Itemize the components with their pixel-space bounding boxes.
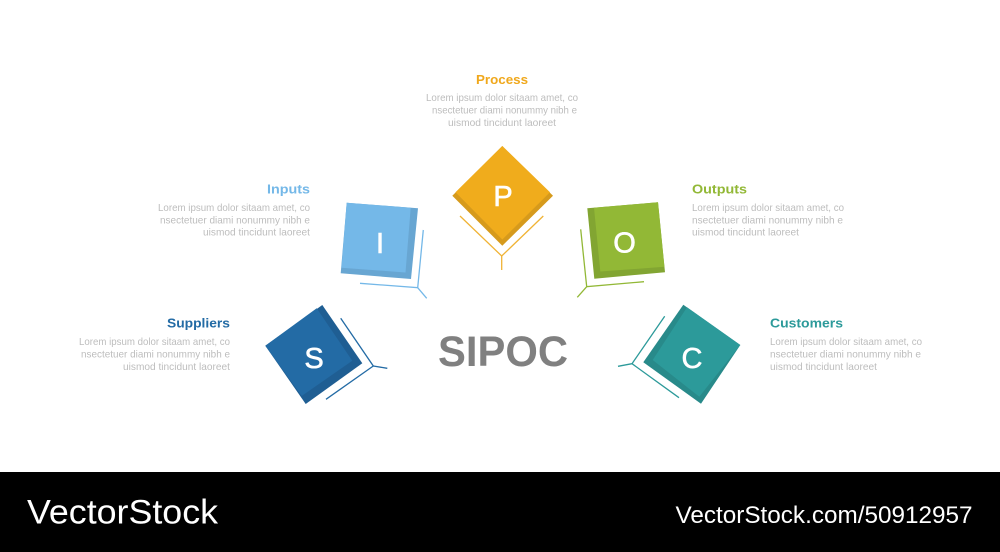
panel: Inputs [158,182,427,298]
icon: C square: C [682,343,702,375]
footer bar [0,472,1000,552]
connector: P bracket [460,216,543,270]
text block: Process description: Lorem ipsum dolor sitaam amet, co [426,92,578,104]
connector: O bracket [577,229,644,297]
icon: S square [265,305,362,404]
text block: Suppliers description: uismod tincidunt laoreet [123,361,230,373]
text block: Inputs description [158,202,310,238]
connector: C bracket [618,316,679,398]
text block: Customers description: nsectetuer diami nonummy nibh e [770,348,921,360]
icon: I square [341,203,418,279]
text block: Inputs description: nsectetuer diami nonummy nibh e [160,214,310,226]
text block: Process description [426,92,578,129]
icon: O square [587,202,665,279]
panel: Outputs [577,182,844,297]
text block: Suppliers description: Lorem ipsum dolor sitaam amet, co [79,336,230,348]
footer logo text: VectorStock [27,494,219,532]
text block: Suppliers description [79,336,230,373]
title: SIPOC: SIPOC [438,328,568,376]
text block: Customers description [770,336,922,373]
panel: Customers [618,305,922,404]
text block: Suppliers description: nsectetuer diami nonummy nibh e [81,348,230,360]
text block: Customers description: uismod tincidunt laoreet [770,361,877,373]
icon: C square [643,305,740,404]
text block: Inputs description: uismod tincidunt laoreet [203,226,310,238]
heading: Suppliers: Suppliers [167,316,230,330]
heading: Customers: Customers [770,316,843,330]
icon: I square: I [376,228,384,260]
heading: Process: Process [476,72,528,87]
text block: Process description: uismod tincidunt laoreet [448,117,556,129]
footer url text: VectorStock.com/50912957 [676,502,972,529]
icon: O square: O [613,228,636,260]
text block: Outputs description: nsectetuer diami nonummy nibh e [692,214,843,226]
text block: Inputs description: Lorem ipsum dolor sitaam amet, co [158,202,310,214]
panel: Process [426,72,578,270]
connector: S bracket [326,318,387,399]
text block: Customers description: Lorem ipsum dolor sitaam amet, co [770,336,922,348]
text block: Outputs description: uismod tincidunt laoreet [692,226,799,238]
panel: Suppliers [79,305,387,404]
icon: S square: S [304,343,324,375]
icon: P diamond [452,146,553,246]
icon: P diamond: P [493,181,513,213]
text block: Outputs description [692,202,844,238]
text block: Outputs description: Lorem ipsum dolor sitaam amet, co [692,202,844,214]
heading: Outputs: Outputs [692,182,747,196]
connector: I bracket [360,230,427,298]
heading: Inputs: Inputs [267,182,310,196]
text block: Process description: nsectetuer diami nonummy nibh e [432,104,577,116]
